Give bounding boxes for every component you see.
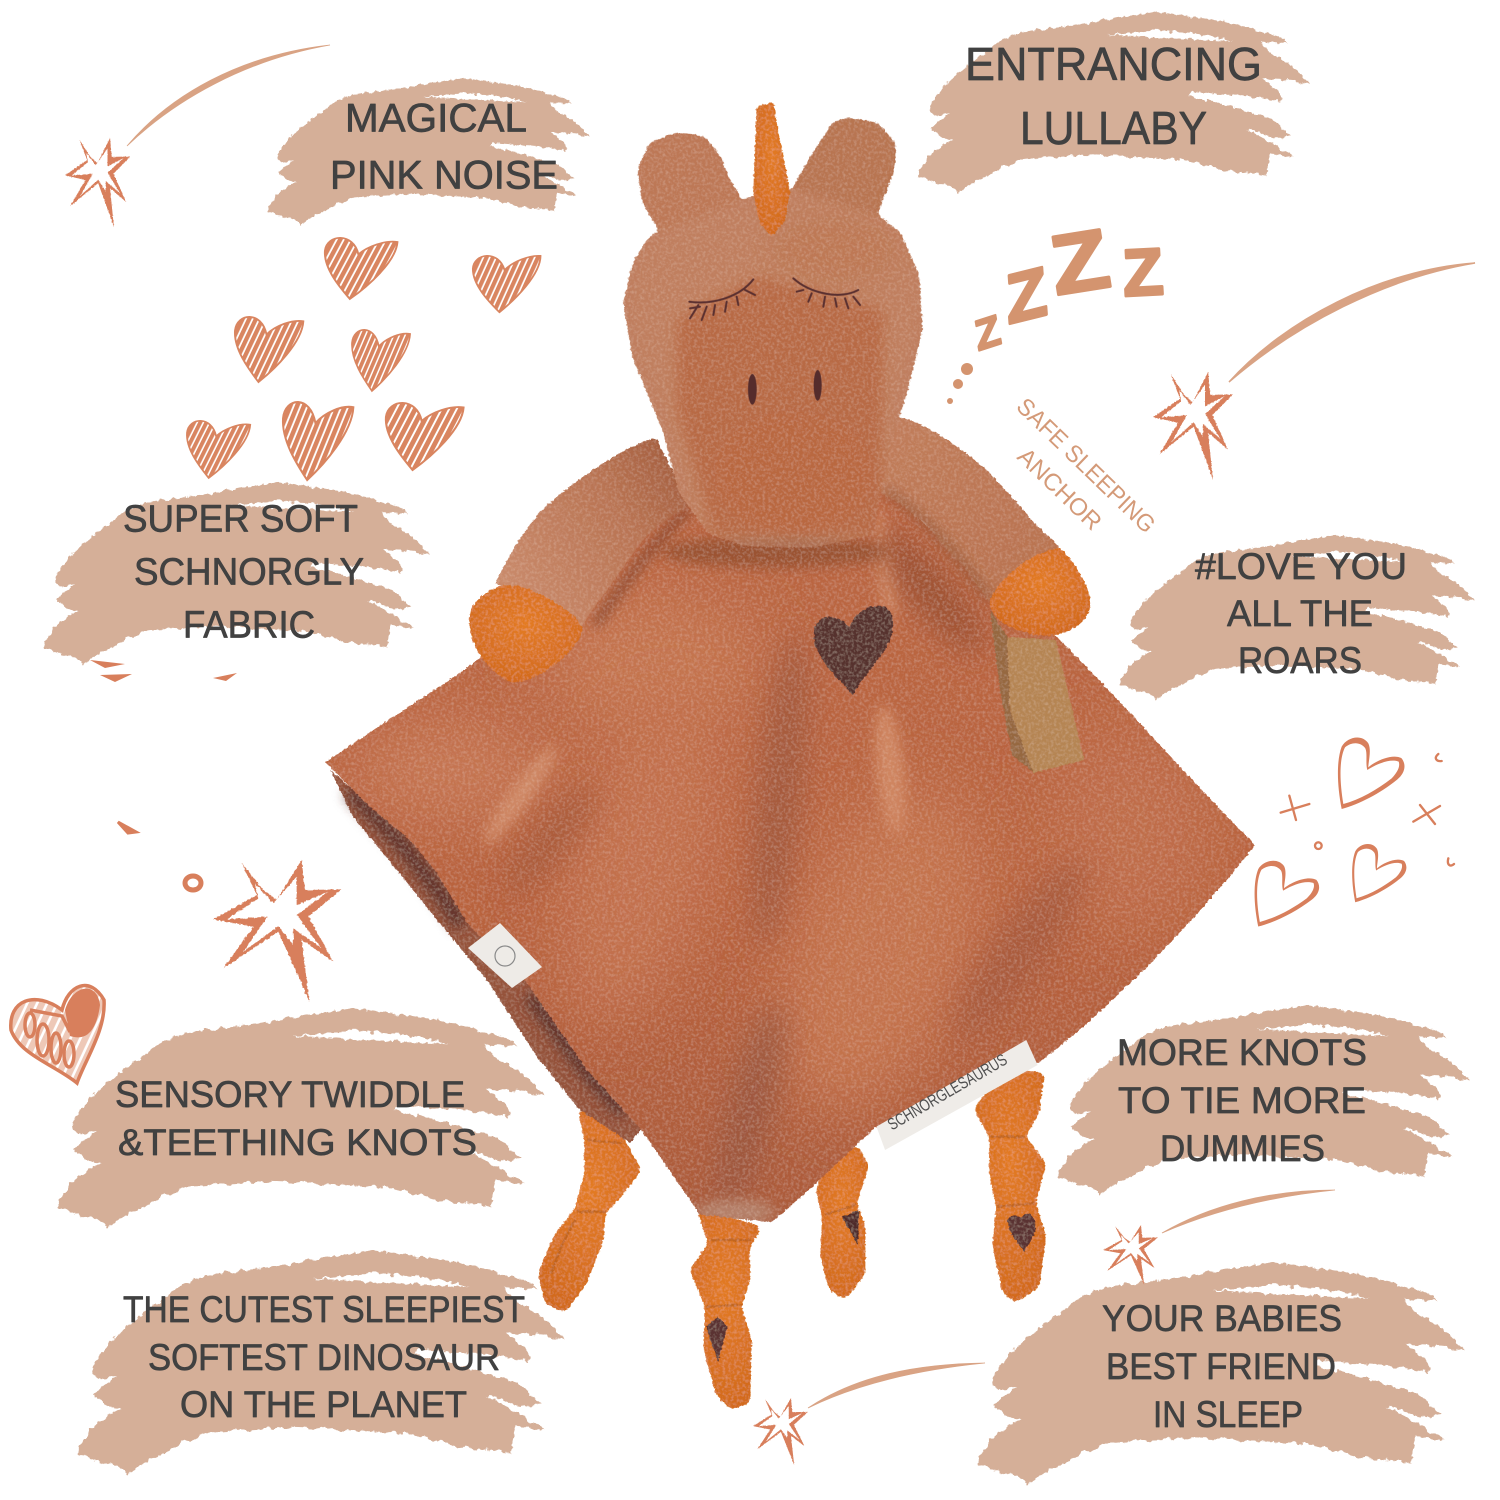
caption: safe sleeping anchor: ANCHOR <box>1012 443 1107 536</box>
ear right <box>793 118 895 213</box>
panel: best friend in sleep: YOUR BABIES <box>1102 1298 1342 1339</box>
icon: scribble heart large <box>11 986 104 1083</box>
panel: super soft fabric: SCHNORGLY <box>134 552 364 594</box>
panel: love you all the roars <box>1120 535 1475 700</box>
panel: super soft fabric: SUPER SOFT <box>123 498 358 540</box>
panel: cutest dinosaur: SOFTEST DINOSAUR <box>148 1337 500 1378</box>
panel: best friend in sleep <box>978 1262 1465 1485</box>
icon: shooting star right <box>1153 263 1475 480</box>
face details <box>689 278 860 405</box>
panel: magical pink noise <box>268 78 590 225</box>
panel: more knots: DUMMIES <box>1160 1128 1325 1169</box>
group of scribble hearts <box>187 238 544 480</box>
caption: safe sleeping anchor: SAFE SLEEPING <box>1011 393 1161 539</box>
panel: magical pink noise: PINK NOISE <box>330 154 558 198</box>
icon: outline hearts with sparkles <box>1255 737 1454 927</box>
brush flecks below fabric panel <box>90 660 237 682</box>
left arm <box>495 438 690 627</box>
zzz <box>947 211 1165 404</box>
plush body <box>300 102 1280 1408</box>
nostrils <box>748 370 822 405</box>
eyes <box>689 278 860 320</box>
panel: love you all the roars: ROARS <box>1238 640 1362 681</box>
panel: more knots: TO TIE MORE <box>1118 1080 1366 1121</box>
tag left <box>468 923 542 988</box>
panel: more knots <box>1058 1005 1470 1195</box>
panel: love you all the roars: #LOVE YOU <box>1195 546 1407 587</box>
icon: shooting star lower right <box>1103 1190 1335 1285</box>
blanket <box>325 492 1255 1222</box>
plush toy <box>300 102 1280 1408</box>
panel: sensory twiddle: SENSORY TWIDDLE <box>115 1074 465 1115</box>
panel: entrancing lullaby <box>918 12 1310 193</box>
panel: more knots: MORE KNOTS <box>1117 1032 1367 1073</box>
zzz: Z <box>1004 252 1049 339</box>
panel: super soft fabric: FABRIC <box>183 604 315 646</box>
icon: burst star <box>118 822 342 1002</box>
panel: sensory twiddle: &TEETHING KNOTS <box>118 1122 477 1163</box>
panel: cutest dinosaur: THE CUTEST SLEEPIEST <box>123 1289 525 1330</box>
blanket back layer <box>330 770 645 1143</box>
head <box>617 102 930 553</box>
panel: magical pink noise: MAGICAL <box>345 96 527 140</box>
tag right <box>876 1040 1038 1150</box>
right paw <box>990 548 1090 636</box>
strap <box>990 610 1084 773</box>
panel: cutest dinosaur <box>78 1250 565 1475</box>
panel: entrancing lullaby: ENTRANCING <box>965 38 1262 90</box>
right arm <box>870 418 1060 607</box>
chest heart <box>814 606 893 695</box>
panel: love you all the roars: ALL THE <box>1227 593 1373 634</box>
zzz: Z <box>1121 234 1165 310</box>
horn <box>753 102 790 237</box>
icon: shooting star top left <box>65 45 330 227</box>
left paw <box>469 585 582 682</box>
panel: sensory twiddle <box>58 1008 545 1228</box>
panel: cutest dinosaur: ON THE PLANET <box>180 1384 467 1425</box>
head shape <box>617 183 930 553</box>
ear left <box>638 133 740 230</box>
knotted corners <box>539 1070 1045 1408</box>
panel: best friend in sleep: IN SLEEP <box>1153 1394 1303 1435</box>
panel: super soft fabric <box>44 482 430 665</box>
panel: best friend in sleep: BEST FRIEND <box>1106 1346 1336 1387</box>
tag right: SCHNORGLESAURUS <box>884 1050 1011 1134</box>
zzz: Z <box>1044 211 1116 313</box>
panel: entrancing lullaby: LULLABY <box>1020 102 1207 154</box>
zzz: Z <box>971 305 1004 360</box>
icon: shooting star bottom <box>753 1363 985 1465</box>
